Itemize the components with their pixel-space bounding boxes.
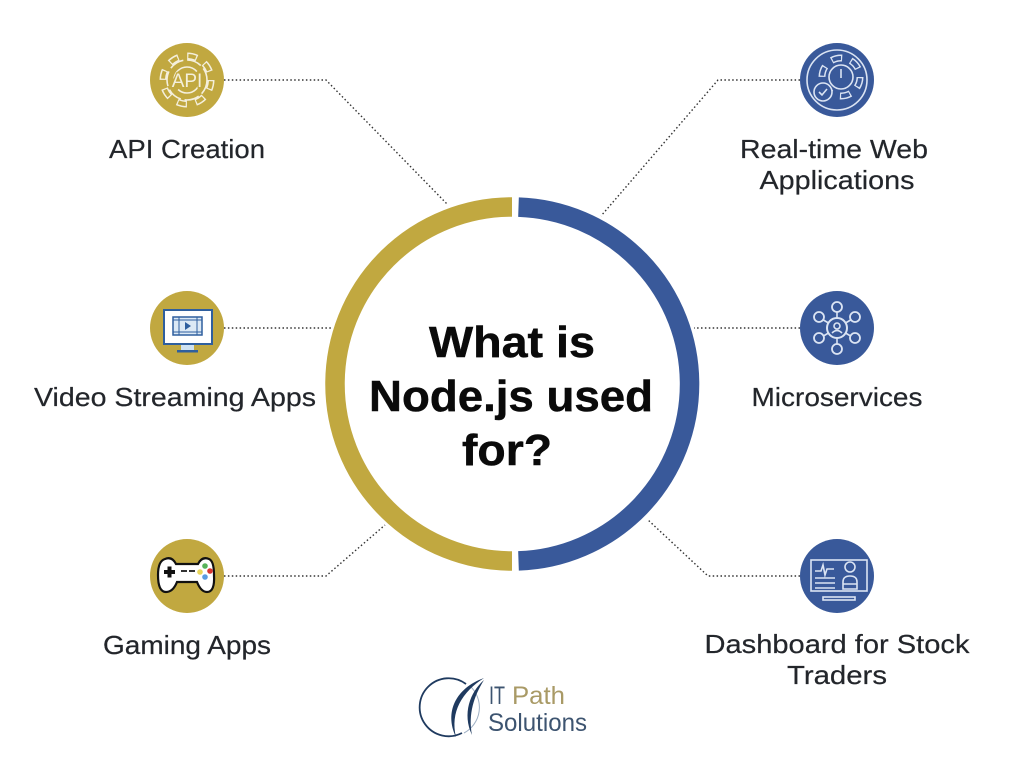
label: Dashboard for Stock Traders — [704, 629, 971, 690]
connector: Microservices — [694, 327, 800, 329]
title: Node.js used — [369, 372, 653, 421]
icon: real-time gear clock — [800, 43, 874, 117]
label: API Creation: API Creation — [109, 134, 265, 164]
connector: API Creation — [224, 80, 448, 205]
logo: IT Path Solutions: Solutions — [488, 709, 587, 737]
icon: API gear: API — [172, 71, 202, 92]
connector: Gaming Apps — [224, 525, 385, 576]
title — [369, 318, 653, 475]
logo: IT Path Solutions: Path — [512, 682, 565, 710]
label: Real-time Web Applications — [740, 134, 928, 195]
central ring — [335, 207, 690, 561]
icon: API gear — [150, 43, 224, 117]
connector: Video Streaming Apps — [224, 327, 331, 329]
icon: game controller — [150, 539, 224, 613]
label: Microservices: Microservices — [752, 382, 922, 412]
icon: microservices network — [800, 291, 874, 365]
logo: IT Path Solutions — [420, 678, 587, 737]
logo: IT Path Solutions: IT — [489, 682, 505, 710]
connector: Dashboard for Stock Traders — [647, 519, 800, 576]
label: Dashboard for Stock Traders: Dashboard for Stock — [704, 629, 971, 659]
title: What is — [429, 318, 595, 367]
label: Real-time Web Applications: Real-time Web — [740, 134, 928, 164]
icon: video monitor — [150, 291, 224, 365]
connector: Real-time Web Applications — [601, 80, 800, 216]
label: Gaming Apps: Gaming Apps — [103, 630, 271, 660]
title: for? — [462, 426, 552, 475]
label: Dashboard for Stock Traders: Traders — [787, 660, 887, 690]
icon: dashboard monitor — [800, 539, 874, 613]
label: Real-time Web Applications: Applications — [760, 165, 914, 195]
label: Video Streaming Apps: Video Streaming Apps — [34, 382, 316, 412]
